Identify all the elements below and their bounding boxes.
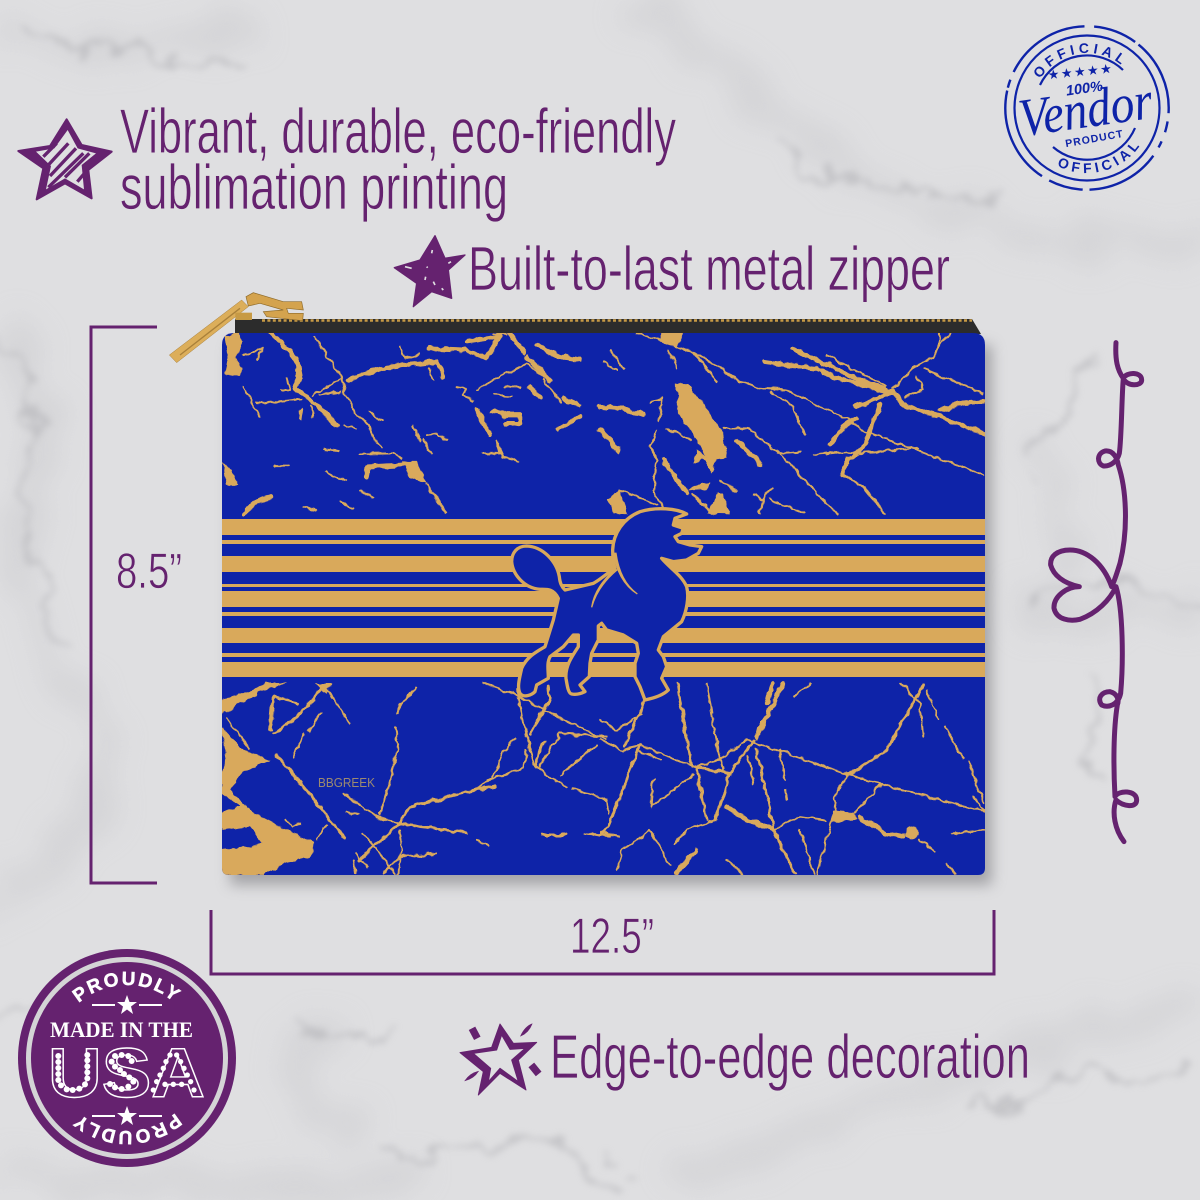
pouch body xyxy=(222,332,985,875)
marble veins: upper right xyxy=(600,332,983,514)
callout: edge-to-edge decoration xyxy=(460,1023,1030,1095)
marble veins xyxy=(222,332,985,875)
zipper pull xyxy=(169,293,303,363)
badge text: USA marquee: USA xyxy=(48,1034,205,1112)
width bracket xyxy=(211,910,994,974)
gold stripes xyxy=(222,519,985,677)
heading: sublimation printing with star icon xyxy=(18,97,676,199)
text block: vibrant durable: Vibrant, durable, eco-friendly xyxy=(120,97,676,167)
marble veins: lower right xyxy=(600,683,985,873)
decorative squiggle with heart xyxy=(1051,343,1142,842)
badge text: proudly bottom: PROUDLY xyxy=(72,1114,182,1144)
zipper xyxy=(169,293,981,363)
icon: speckled star xyxy=(394,236,465,307)
official vendor stamp: OFFICIAL xyxy=(1058,144,1140,174)
poodle silhouette xyxy=(512,509,702,700)
badge text: proudly top: PROUDLY xyxy=(72,972,182,1002)
callout: metal zipper xyxy=(394,235,950,307)
official vendor stamp: ★★★★★ xyxy=(1047,62,1114,83)
text line: sublimation printing: sublimation printing xyxy=(120,153,508,223)
badge: proudly made in the USA xyxy=(18,949,236,1167)
marble veins: lower left xyxy=(222,683,610,875)
text: built-to-last metal zipper: Built-to-last metal zipper xyxy=(468,235,950,304)
marble veins: upper left xyxy=(223,332,580,513)
official vendor stamp: OFFICIAL xyxy=(1034,43,1122,77)
height bracket xyxy=(91,327,157,883)
icon: outlined burst star xyxy=(460,1024,539,1095)
width label: 12.5” xyxy=(570,908,654,964)
official vendor stamp: Vendor xyxy=(1015,70,1157,148)
official vendor stamp xyxy=(1004,25,1170,191)
badge text: made in the: MADE IN THE xyxy=(50,1017,193,1042)
brand mark: BBGREEK xyxy=(318,776,376,790)
badge stars and rules xyxy=(92,995,162,1125)
height label: 8.5” xyxy=(116,543,182,599)
icon: striped star xyxy=(18,119,112,199)
pouch shadow xyxy=(230,345,992,885)
zipper tape xyxy=(235,319,981,334)
marquee bulbs xyxy=(55,1052,197,1093)
official vendor stamp: 100% xyxy=(1065,79,1104,100)
official vendor stamp: PRODUCT xyxy=(1064,128,1125,150)
